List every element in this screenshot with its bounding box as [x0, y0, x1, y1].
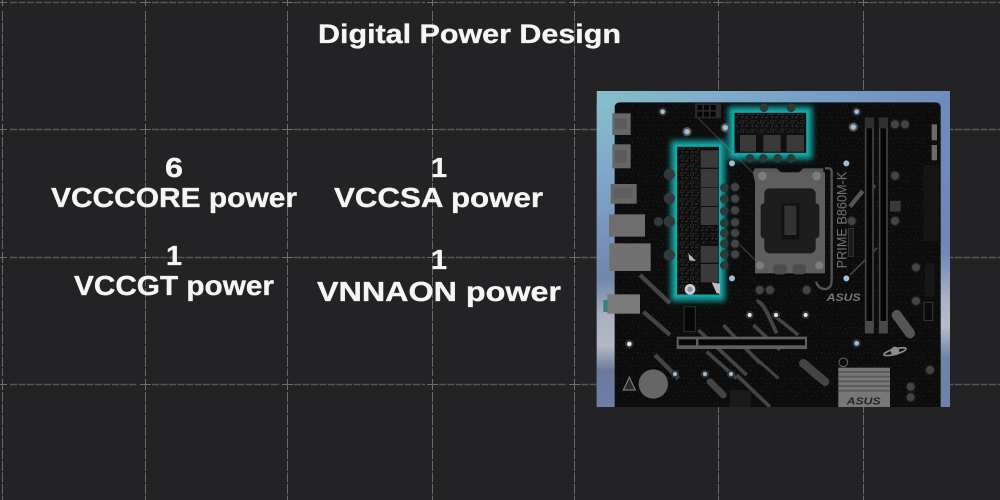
VRM zone: VCCSA and VCCGT — [733, 112, 807, 154]
stat: VNNAON power: VNNAON power — [317, 276, 561, 307]
title: Digital Power Design — [318, 19, 621, 49]
stat: VCCCORE power — [51, 152, 297, 213]
stat: VCCCORE power: 6 — [165, 152, 183, 183]
RAM slots — [865, 118, 888, 333]
stat: VCCSA power: VCCSA power — [334, 182, 543, 213]
ASUS logo: ASUS — [826, 292, 861, 304]
diagonal trace stripes — [640, 118, 910, 407]
rear I/O ports — [603, 113, 651, 314]
stat: VCCSA power: 1 — [431, 152, 447, 183]
VRM zone: VCCCORE — [676, 146, 720, 296]
warning triangle — [623, 377, 635, 390]
small chip near socket — [848, 228, 854, 257]
PCIe slot — [677, 337, 807, 349]
chipset chip — [730, 390, 751, 407]
stat: VCCGT power: VCCGT power — [74, 270, 274, 301]
chipset heatsink: ASUS — [845, 396, 881, 407]
faint capacitors around VRM — [654, 103, 795, 270]
stat: VNNAON power — [317, 244, 561, 307]
stat: VNNAON power: 1 — [431, 244, 447, 275]
mounting holes — [626, 108, 860, 377]
stat: VCCGT power — [74, 240, 274, 301]
teal glow highlights — [675, 111, 808, 297]
top power connector — [695, 103, 721, 118]
board — [615, 102, 941, 416]
blue backdrop — [597, 91, 950, 407]
saturn logo — [883, 346, 907, 357]
chipset heatsink — [838, 358, 890, 407]
stat: VCCSA power — [334, 152, 543, 213]
CPU socket — [753, 168, 832, 289]
capacitors — [730, 120, 935, 402]
motherboard illustration — [597, 91, 950, 416]
stat: VCCCORE power: VCCCORE power — [51, 182, 297, 213]
right edge connectors — [890, 124, 939, 321]
board model label: PRIME B860M-K — [833, 171, 849, 268]
battery — [639, 369, 668, 399]
board surface detail — [615, 102, 941, 407]
M.2 slot — [684, 307, 695, 332]
stat: VCCGT power: 1 — [166, 240, 182, 271]
